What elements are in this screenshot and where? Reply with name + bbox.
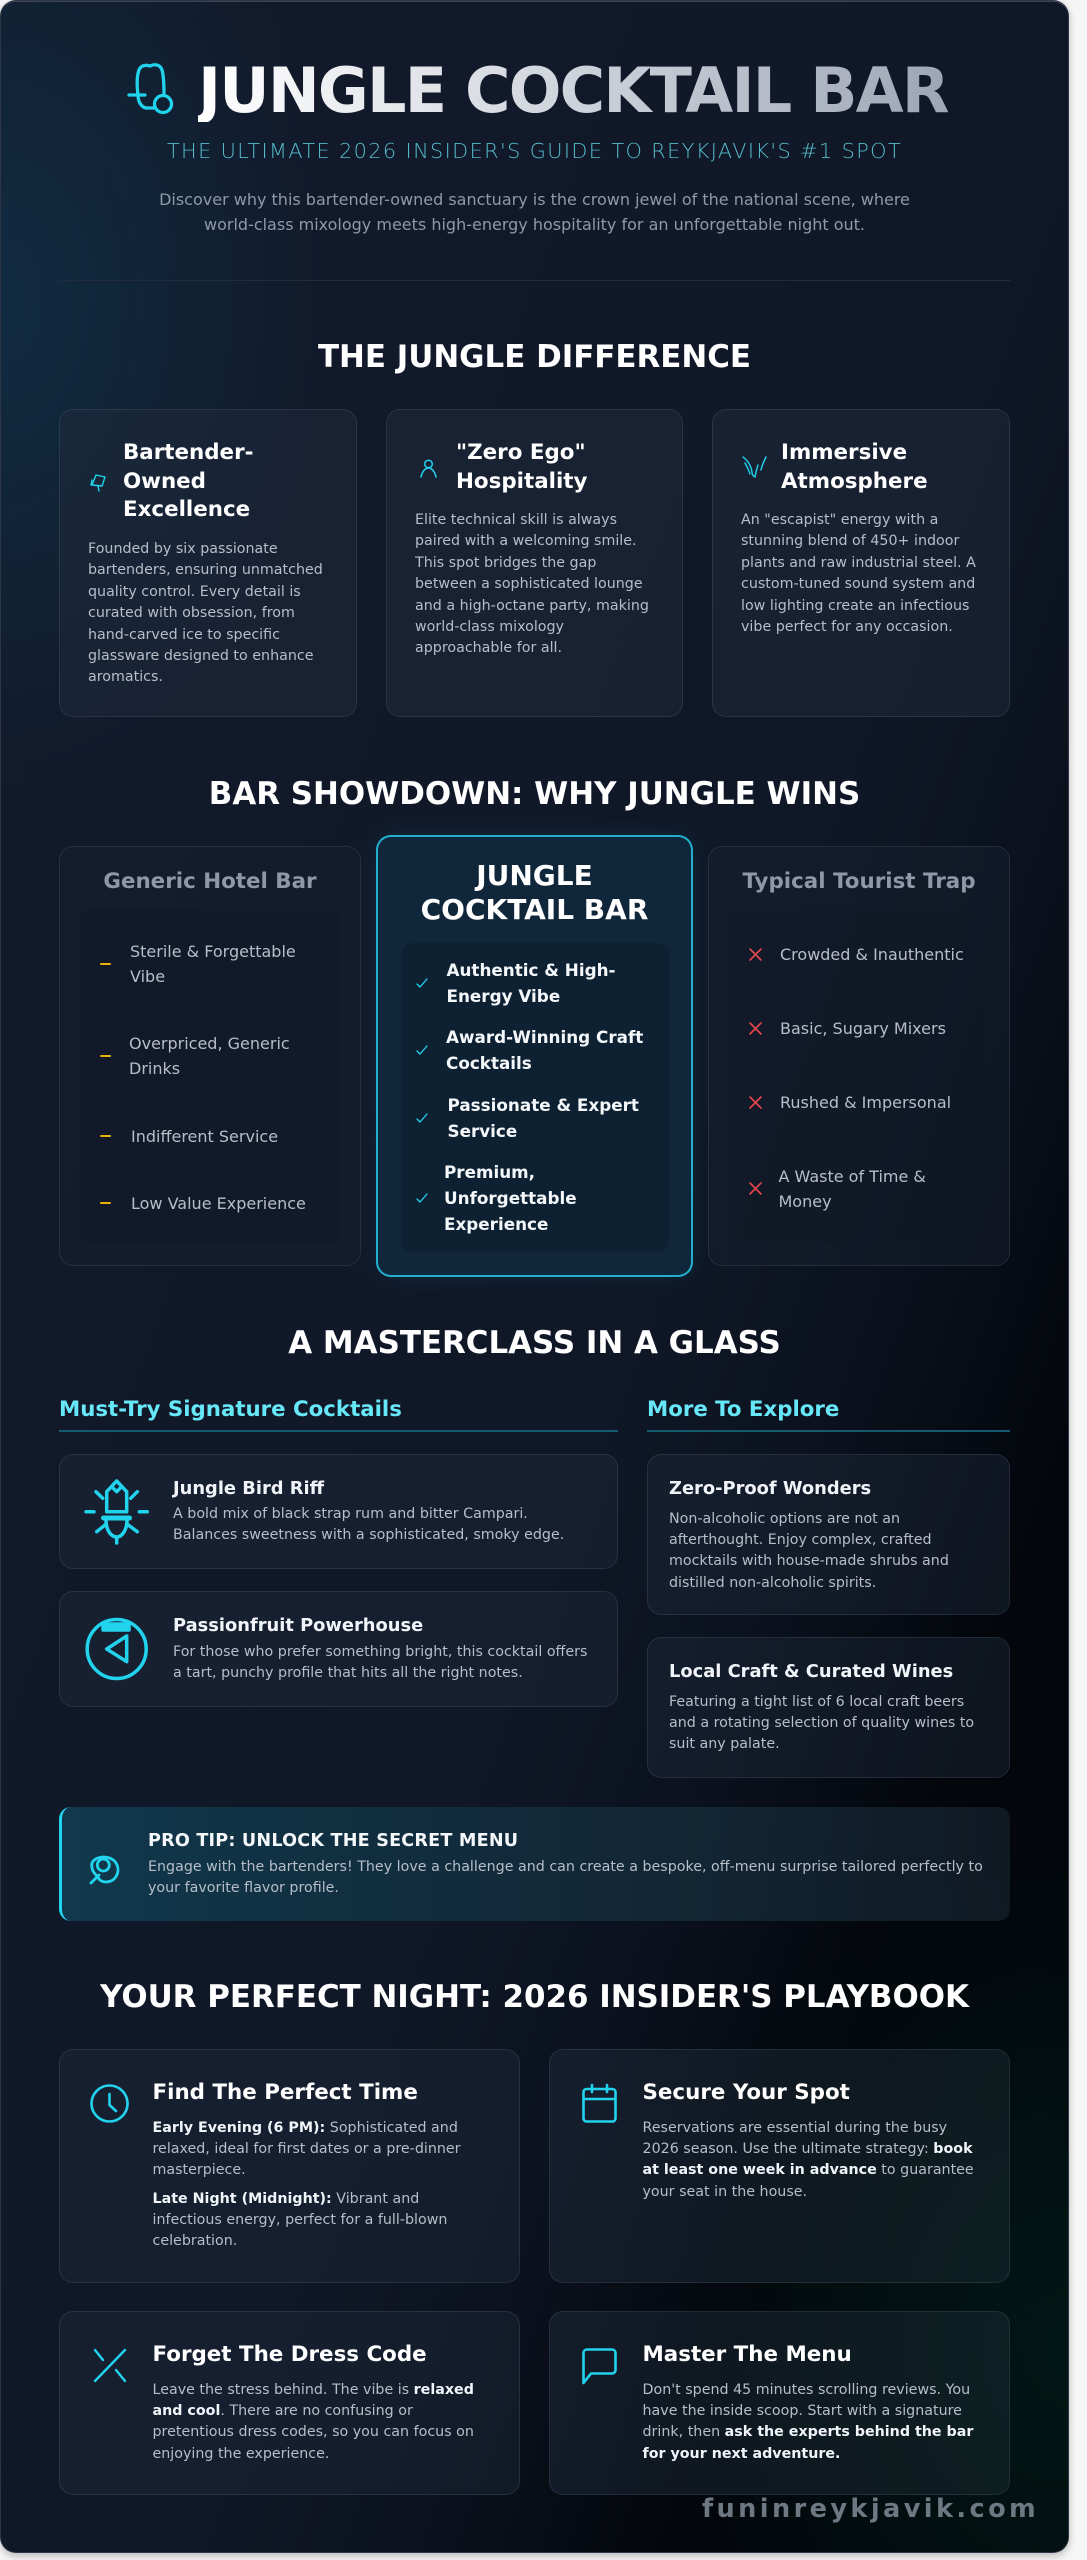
panel: local craft and wines <box>647 1637 1010 1778</box>
item: waste of time: Money <box>778 1192 832 1210</box>
item: premium experience: Unforgettable <box>444 1188 577 1208</box>
panel: bartender-owned excellence <box>59 409 357 717</box>
icon: crossed lines <box>94 2348 126 2382</box>
option text: and a rotating selection of quality wines to <box>669 1715 974 1731</box>
item: overpriced drinks <box>100 1034 290 1078</box>
panel: secure your spot <box>549 2049 1010 2283</box>
option text: Non-alcoholic options are not an <box>669 1510 900 1526</box>
item: authentic vibe: Energy Vibe <box>446 986 560 1006</box>
option text: Featuring a tight list of 6 local craft beers <box>669 1694 964 1710</box>
option name: Local Craft & Curated Wines <box>669 1661 953 1682</box>
list: generic bar drawbacks <box>80 910 340 1243</box>
tip text <box>148 1858 983 1896</box>
panel: zero ego hospitality <box>386 409 683 717</box>
item: waste of time: A Waste of Time & <box>778 1166 926 1186</box>
card text: An "escapist" energy with a <box>741 512 938 528</box>
card heading: Owned <box>123 469 206 494</box>
column heading <box>421 859 648 926</box>
subheading: more to explore: More To Explore <box>647 1397 839 1422</box>
card text <box>414 512 649 656</box>
item: sterile vibe: Vibe <box>130 967 165 986</box>
panel: jungle bird riff <box>59 1454 618 1569</box>
item: waste of time <box>749 1166 926 1210</box>
list: jungle strengths <box>402 943 669 1252</box>
tip title: PRO TIP: UNLOCK THE SECRET MENU <box>148 1831 518 1851</box>
card heading: Excellence <box>123 497 250 522</box>
card text: relaxed, ideal for first dates or a pre-dinner <box>152 2141 461 2157</box>
list: tourist trap drawbacks <box>728 910 988 1243</box>
card text: low lighting create an infectious <box>741 598 969 614</box>
item: authentic vibe: Authentic & High- <box>446 960 616 980</box>
panel: passionfruit powerhouse <box>59 1591 618 1707</box>
card heading: Master The Menu <box>642 2342 852 2367</box>
panel: master the menu <box>549 2311 1010 2495</box>
card text: late night: celebration. <box>152 2233 237 2249</box>
panel: immersive atmosphere <box>712 409 1010 717</box>
icon: person <box>420 460 437 478</box>
cocktail text <box>173 1644 587 1681</box>
tip text: your favorite flavor profile. <box>148 1880 339 1896</box>
column heading: JUNGLE <box>476 859 593 892</box>
column heading: COCKTAIL BAR <box>421 893 648 926</box>
card text: for your next adventure. <box>642 2446 840 2462</box>
card text: world-class mixology <box>415 619 564 635</box>
card text <box>152 2382 474 2462</box>
option text: afterthought. Enjoy complex, crafted <box>669 1532 932 1548</box>
card text: between a sophisticated lounge <box>415 576 643 592</box>
cocktail name: Jungle Bird Riff <box>173 1478 324 1499</box>
card text: late night <box>152 2190 447 2249</box>
intro text: world-class mixology meets high-energy hospitality for an unforgettable night out. <box>204 215 865 234</box>
item: award-winning <box>416 1027 643 1073</box>
item: overpriced drinks: Drinks <box>129 1059 180 1078</box>
card text: drink, then ask the experts behind the bar <box>642 2424 973 2440</box>
card text: stunning blend of 450+ indoor <box>741 533 959 549</box>
panel: generic hotel bar <box>59 846 361 1266</box>
item: crowded: Crowded & Inauthentic <box>780 944 964 964</box>
cocktail text: A bold mix of black strap rum and bitter Campari. <box>173 1506 528 1522</box>
card heading: Bartender- <box>123 440 254 465</box>
item: premium experience <box>416 1162 577 1234</box>
watermark: funinreykjavik.com <box>702 2494 1039 2524</box>
card text: plants and raw industrial steel. A <box>741 555 976 571</box>
card text: have the inside scoop. Start with a signature <box>642 2403 962 2419</box>
heading: bar showdown: BAR SHOWDOWN: WHY JUNGLE WINS <box>209 776 860 812</box>
icon: calendar <box>582 2084 617 2123</box>
cocktail text: a tart, punchy profile that hits all the right notes. <box>173 1665 523 1681</box>
item: low value: Low Value Experience <box>131 1194 306 1212</box>
cocktail text: Balances sweetness with a sophisticated, smoky edge. <box>173 1527 564 1543</box>
card heading: Forget The Dress Code <box>152 2342 427 2367</box>
subheading: must-try cocktails: Must-Try Signature Cocktails <box>59 1397 402 1422</box>
item: passionate service <box>416 1095 639 1141</box>
subheading: must-try cocktails <box>59 1394 618 1432</box>
card heading <box>456 440 587 494</box>
card text: Early Evening (6 PM): Sophisticated and <box>152 2120 458 2136</box>
item: sterile vibe <box>100 942 296 986</box>
card text: Leave the stress behind. The vibe is relaxed <box>152 2382 474 2398</box>
item: overpriced drinks: Overpriced, Generic <box>129 1034 290 1053</box>
intro text: Discover why this bartender-owned sanctuary is the crown jewel of the national scene, where <box>159 190 910 209</box>
card text: bartenders, ensuring unmatched <box>88 562 323 578</box>
subtitle: THE ULTIMATE 2026 INSIDER'S GUIDE TO REYKJAVIK'S #1 SPOT <box>167 139 902 163</box>
card text: vibe perfect for any occasion. <box>741 619 953 635</box>
item: rushed: Rushed & Impersonal <box>780 1092 951 1112</box>
card text: paired with a welcoming smile. <box>415 533 637 549</box>
card heading: Find The Perfect Time <box>152 2080 418 2105</box>
cocktail text: For those who prefer something bright, this cocktail offers <box>173 1644 587 1660</box>
card text: hand-carved ice to specific <box>88 627 280 643</box>
card heading: Immersive <box>781 440 907 465</box>
item: passionate service: Passionate & Expert <box>448 1095 639 1115</box>
heading: the jungle difference: THE JUNGLE DIFFERENCE <box>318 338 751 374</box>
card text: Don't spend 45 minutes scrolling reviews. You <box>642 2382 970 2398</box>
card text: your seat in the house. <box>642 2184 807 2200</box>
column heading: Generic Hotel Bar <box>103 869 317 894</box>
option name: Zero-Proof Wonders <box>669 1478 871 1499</box>
card text <box>642 2380 973 2465</box>
card text: and cool. There are no confusing or <box>152 2403 413 2419</box>
card text: late night: infectious energy, perfect for a full-blown <box>152 2212 447 2228</box>
panel: jungle cocktail bar <box>376 835 693 1277</box>
card text: custom-tuned sound system and <box>741 576 975 592</box>
cocktail text <box>173 1506 564 1543</box>
card heading <box>123 440 254 522</box>
card text: Founded by six passionate <box>88 541 278 557</box>
panel: zero-proof wonders <box>647 1454 1010 1615</box>
title: JUNGLE COCKTAIL BAR <box>198 54 948 127</box>
card text: Reservations are essential during the busy <box>642 2120 947 2136</box>
card text <box>642 2120 974 2200</box>
card text: masterpiece. <box>152 2162 246 2178</box>
icon: secret menu <box>90 1856 120 1884</box>
card text <box>152 2120 461 2178</box>
column heading: Typical Tourist Trap <box>742 869 976 894</box>
icon: antlers leaf <box>742 456 767 478</box>
intro text <box>159 190 910 234</box>
item: indifferent service: Indifferent Service <box>131 1126 278 1146</box>
icon: cocktail logo <box>127 63 174 114</box>
icon: tilted glass <box>90 474 106 492</box>
card heading: Atmosphere <box>781 469 928 494</box>
item: premium experience: Premium, <box>444 1162 535 1182</box>
card text: approachable for all. <box>415 640 562 656</box>
card text: 2026 season. Use the ultimate strategy: book <box>642 2141 973 2157</box>
card text: late night: Late Night (Midnight): Vibrant and <box>152 2190 419 2206</box>
item: sugary mixers: Basic, Sugary Mixers <box>780 1018 946 1038</box>
item: award-winning: Award-Winning Craft <box>446 1027 643 1047</box>
card text: enjoying the experience. <box>152 2446 329 2462</box>
item: award-winning: Cocktails <box>446 1053 532 1073</box>
card heading: "Zero Ego" <box>456 440 586 465</box>
card text: Elite technical skill is always <box>415 512 617 528</box>
item: premium experience: Experience <box>444 1214 548 1234</box>
card text: aromatics. <box>88 669 163 685</box>
item: passionate service: Service <box>448 1121 517 1141</box>
item: sterile vibe: Sterile & Forgettable <box>130 942 296 961</box>
tip text: Engage with the bartenders! They love a challenge and can create a bespoke, off-menu surprise tailored perfectly to <box>148 1858 983 1874</box>
card text: curated with obsession, from <box>88 605 295 621</box>
subheading: more to explore <box>647 1394 1010 1432</box>
panel: find the perfect time <box>59 2049 520 2283</box>
icon: speech bubble <box>582 2348 617 2384</box>
card heading: Hospitality <box>456 469 587 494</box>
card text: glassware designed to enhance <box>88 648 313 664</box>
option text: distilled non-alcoholic spirits. <box>669 1575 876 1591</box>
icon: passionfruit <box>85 1618 148 1680</box>
panel: typical tourist trap <box>708 846 1010 1266</box>
cocktail name: Passionfruit Powerhouse <box>173 1615 423 1636</box>
heading: your perfect night: YOUR PERFECT NIGHT: 2026 INSIDER'S PLAYBOOK <box>100 1978 969 2014</box>
card text: and a high-octane party, making <box>415 598 649 614</box>
option text: mocktails with house-made shrubs and <box>669 1553 949 1569</box>
heading: a masterclass in a glass: A MASTERCLASS IN A GLASS <box>288 1324 781 1360</box>
card text <box>741 512 976 635</box>
card text: at least one week in advance to guarantee <box>642 2162 974 2178</box>
card heading <box>781 440 928 494</box>
card text: quality control. Every detail is <box>88 584 301 600</box>
option text: suit any palate. <box>669 1736 780 1752</box>
card text: This spot bridges the gap <box>415 555 596 571</box>
icon: jungle bird <box>84 1479 150 1545</box>
icon: clock <box>90 2084 129 2123</box>
callout: pro tip <box>59 1807 1010 1921</box>
item: authentic vibe <box>416 960 616 1006</box>
card heading: Secure Your Spot <box>642 2080 850 2105</box>
panel: forget the dress code <box>59 2311 520 2495</box>
card text <box>88 541 323 685</box>
card text: pretentious dress codes, so you can focus on <box>152 2424 474 2440</box>
option text <box>669 1510 949 1591</box>
option text <box>669 1694 974 1752</box>
